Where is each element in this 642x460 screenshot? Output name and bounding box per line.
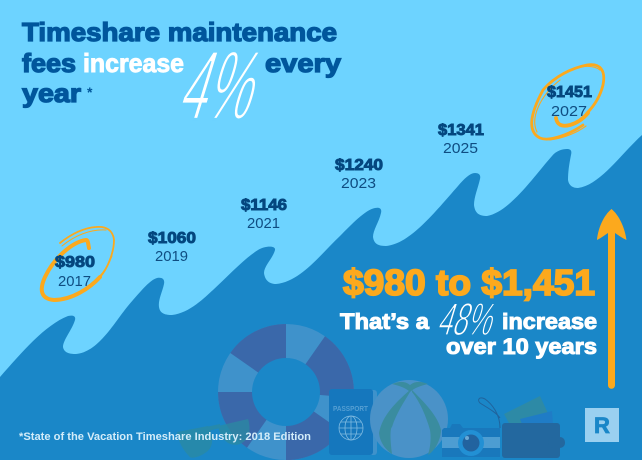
wave chart area <box>0 135 642 460</box>
illustration: camera <box>442 398 500 457</box>
callout text: That’s a <box>340 309 430 334</box>
data point 2019 <box>148 230 196 265</box>
data point 2017 <box>42 227 114 300</box>
data point 2021: 2021 <box>247 215 280 232</box>
data point 2023: $1240 <box>335 157 383 174</box>
title: fees <box>22 48 76 78</box>
illustration: sunglasses <box>177 419 249 458</box>
footnote: *State of the Vacation Timeshare Industry: 2018 Edition <box>19 431 311 443</box>
data point 2023: 2023 <box>341 175 376 192</box>
title: year <box>22 78 81 108</box>
data point 2019: 2019 <box>155 248 188 265</box>
data point 2017: 2017 <box>58 273 91 290</box>
callout text: increase <box>502 309 597 334</box>
circle scribble 2027 <box>532 65 604 140</box>
handwritten 4 percent: 4% <box>169 31 275 141</box>
callout text: over 10 years <box>446 334 597 359</box>
illustration: beach ball <box>370 380 448 458</box>
data point 2027: 2027 <box>551 103 587 120</box>
data point 2023 <box>335 157 383 192</box>
title: Timeshare maintenance <box>22 17 337 47</box>
camera strap <box>479 398 500 428</box>
illustration: passport: PASSPORT <box>333 406 369 413</box>
icon: globe <box>339 416 363 440</box>
data point 2017: $980 <box>55 254 95 271</box>
data point 2025: $1341 <box>438 122 484 139</box>
data point 2025: 2025 <box>443 140 478 157</box>
title: * <box>87 84 93 100</box>
logo <box>585 408 619 442</box>
data point 2027 <box>532 65 604 140</box>
arrow <box>597 209 626 389</box>
callout headline: $980 to $1,451 <box>343 262 595 303</box>
data point 2019: $1060 <box>148 230 196 247</box>
title: every <box>265 48 342 78</box>
illustration: passport <box>329 389 377 455</box>
data point 2021: $1146 <box>241 197 287 214</box>
illustration: life ring <box>218 324 354 460</box>
data point 2025 <box>438 122 484 157</box>
data point 2027: $1451 <box>547 84 592 101</box>
title <box>22 17 342 108</box>
logo: R <box>594 413 610 438</box>
illustration: wallet <box>502 396 565 458</box>
data point 2021 <box>241 197 287 232</box>
circle scribble 2017 <box>42 227 114 300</box>
title: increase <box>83 48 184 78</box>
callout text <box>340 309 597 359</box>
handwritten 48 percent: 48% <box>433 293 503 345</box>
